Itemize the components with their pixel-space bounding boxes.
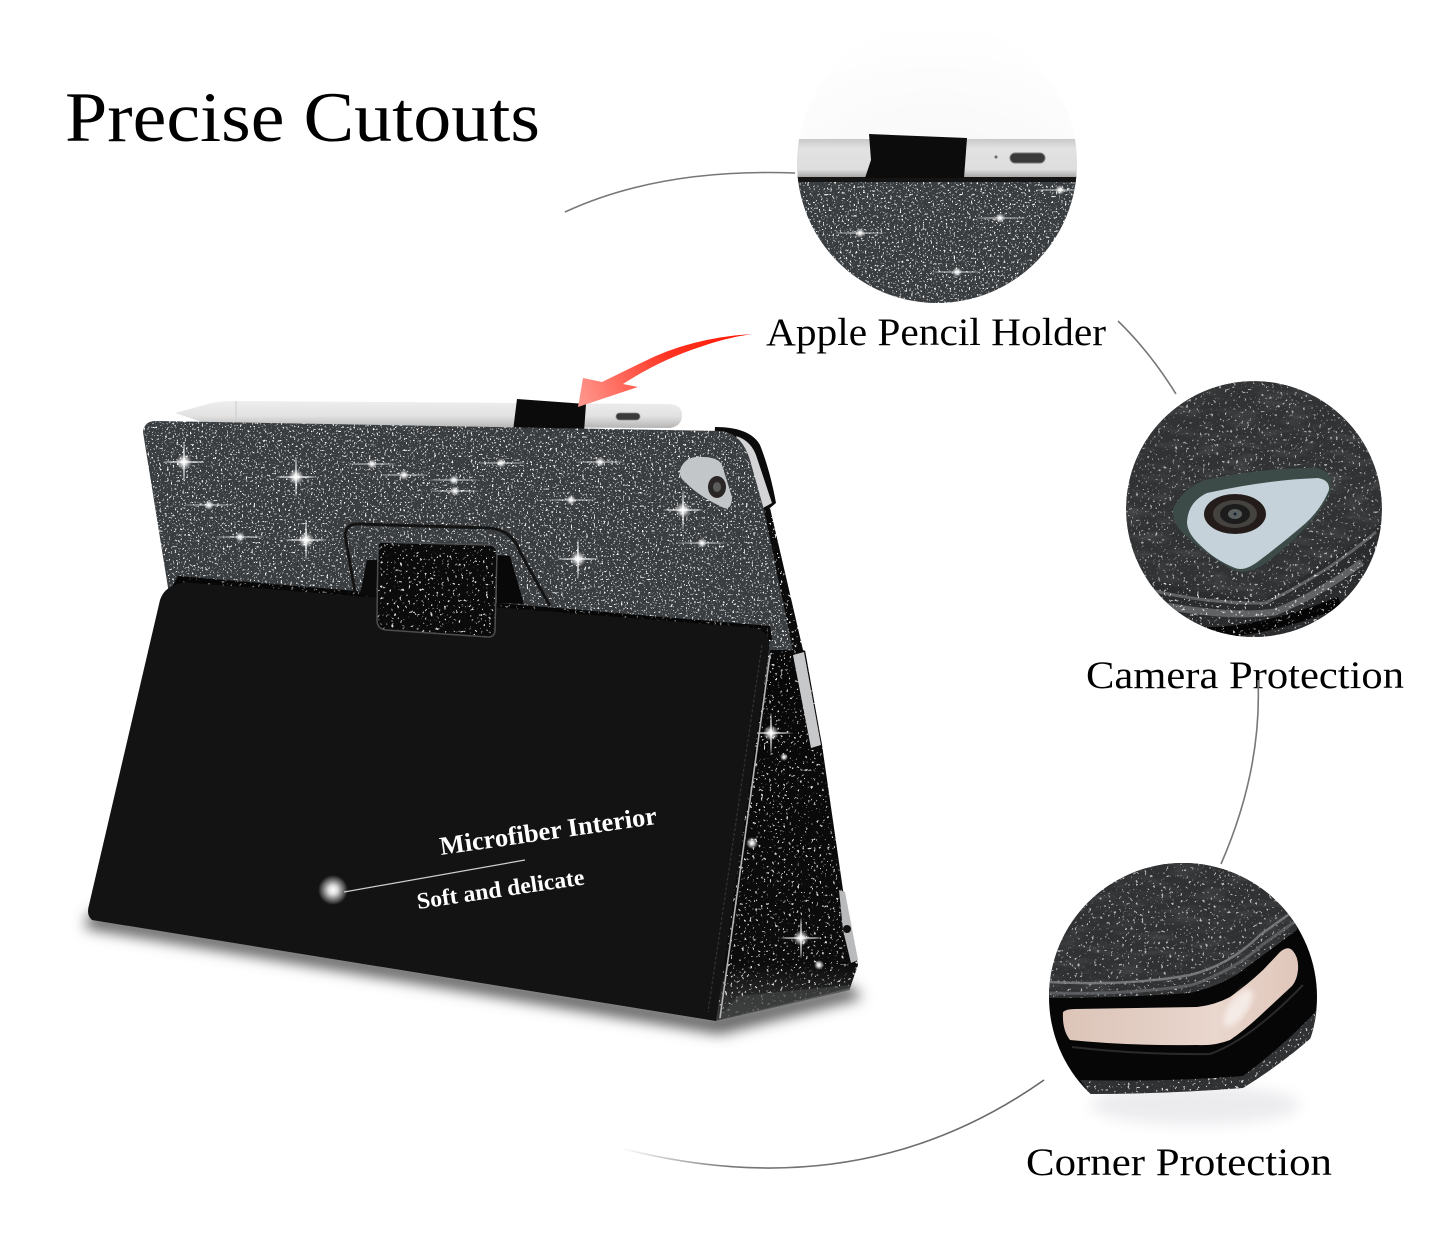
bottom glitter strip (1080, 1007, 1320, 1094)
strap border (377, 542, 497, 637)
port dot (994, 156, 998, 158)
connector line: corner callout top (1221, 680, 1258, 864)
pencil body (790, 139, 1090, 177)
side stand triangle (714, 650, 858, 1021)
headphone jack (843, 925, 851, 933)
microfiber front cover (88, 583, 770, 1021)
bottom edge bands (1130, 522, 1382, 640)
glitter sparkles (164, 442, 726, 579)
apple pencil (175, 399, 682, 432)
circle: apple pencil holder close-up (797, 134, 1077, 303)
stitched edge (1048, 910, 1295, 983)
lower edge (1048, 920, 1297, 993)
pencil port (616, 413, 640, 420)
circle: corner protection close-up (1045, 860, 1325, 1125)
leather glitter (1126, 381, 1382, 637)
red arrow to pencil holder (578, 334, 752, 407)
soft shadow below corner (1090, 1085, 1300, 1125)
circle: camera protection close-up (1126, 381, 1382, 640)
case top edge (790, 176, 1090, 182)
charging port (1010, 153, 1045, 163)
black rim above front cover (165, 576, 772, 640)
side sparkles (746, 713, 824, 970)
leather glitter top (1045, 860, 1297, 998)
elastic band (865, 134, 967, 178)
back cover glitter panel (143, 421, 800, 690)
white glitter edge (720, 655, 770, 1018)
feature pointer line (344, 860, 525, 892)
lens (1204, 494, 1266, 534)
closure strap (377, 542, 497, 637)
connector line: corner callout bottom (620, 1080, 1044, 1168)
connector line: camera callout (1118, 321, 1176, 394)
camera cutout (680, 457, 732, 508)
tablet lower silver edge (839, 890, 858, 963)
ground shadow (85, 912, 862, 1034)
camera plate (1187, 478, 1329, 569)
rose gold tablet edge (1063, 948, 1298, 1045)
edge glitter (1148, 525, 1381, 637)
strap outline loop (345, 524, 550, 606)
highlight on tablet edge (1222, 985, 1254, 1028)
pencil holder band (513, 399, 586, 432)
silver side buttons (793, 652, 821, 748)
microfiber subtext: Soft and delicate (415, 865, 586, 914)
label: corner protection: Corner Protection (1026, 1141, 1332, 1184)
camera recess (1173, 468, 1331, 572)
fabric glitter (798, 178, 1076, 303)
pencil cone seam (235, 401, 237, 426)
back cover rim (700, 427, 850, 985)
product: tablet case on stand (85, 399, 862, 1034)
black under layer (1045, 860, 1325, 1093)
label: apple pencil holder: Apple Pencil Holder (766, 311, 1106, 354)
title: Precise Cutouts (65, 79, 540, 157)
sparkles (836, 185, 1084, 277)
feature point glow (318, 875, 348, 905)
connector line: pencil callout (565, 172, 795, 212)
silver tablet edge (736, 436, 772, 508)
label: camera protection: Camera Protection (1086, 654, 1404, 697)
stitching (708, 645, 762, 1012)
microfiber heading: Microfiber Interior (438, 801, 659, 861)
bumper line (1072, 985, 1303, 1054)
